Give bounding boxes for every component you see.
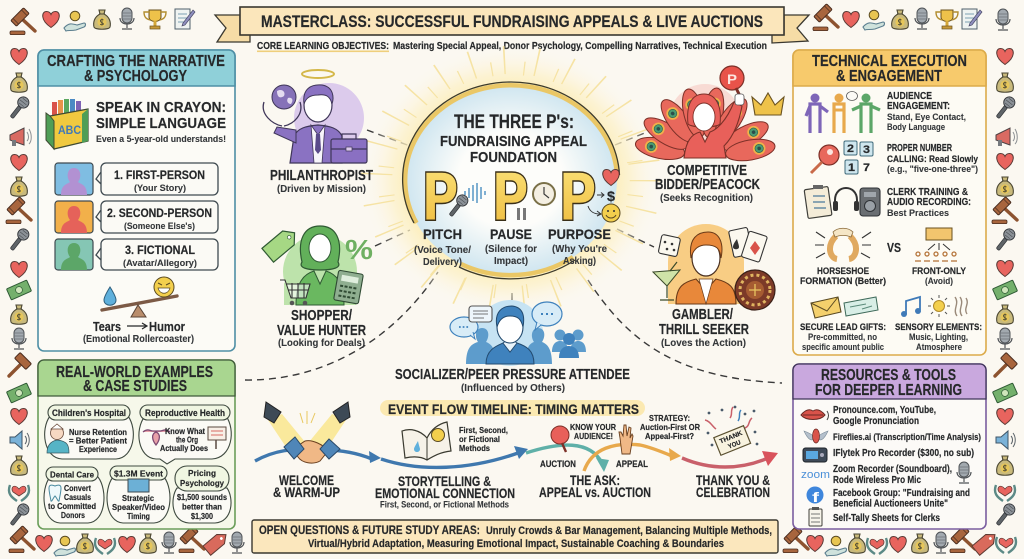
timeline step: storytelling and emotional connection [375,422,528,510]
panel heading: FOR DEEPER LEARNING [815,382,962,399]
proper number calling [811,141,979,175]
pause: P [491,159,529,236]
timeline step: welcome and warm-up: WELCOME [279,473,334,488]
persona: socializer / peer pressure attendee [395,300,630,394]
speak in crayon text: Even a 5-year-old understands! [96,134,226,144]
timeline step: the ask, appeal vs auction: Appeal-First? [645,431,694,441]
proper number calling: CALLING: Read Slowly [887,154,979,165]
decorative icon border: top right [813,4,1010,31]
panel heading [793,364,986,399]
proper number calling: 1 [848,162,855,174]
case: children's hospital: = Better Patient [69,436,127,446]
case: children's hospital [45,405,133,459]
resource: iflytek recorder: IFlytek Pro Recorder ($300, no sub) [833,448,974,459]
persona: competitive bidder / peacock: BIDDER/PEACOCK [655,177,760,193]
purpose: P [558,159,597,236]
audience engagement: Stand, Eye Contact, [887,112,966,123]
panel heading: & PSYCHOLOGY [84,68,188,85]
pitch: PITCH [423,226,462,242]
speak in crayon text: SIMPLE LANGUAGE [96,115,226,132]
persona: shopper / value hunter: VALUE HUNTER [277,323,366,339]
case: reproductive health: Actually Does [160,444,208,453]
front-only formation [912,228,967,287]
open questions banner: Unruly Crowds & Bar Management, Balancing Multiple Methods, [486,525,772,537]
timeline step: the ask, appeal vs auction: STRATEGY: [649,413,690,423]
event flow timeline heading: EVENT FLOW TIMELINE: TIMING MATTERS [388,401,639,417]
case: pricing psychology: $1,500 sounds [177,493,227,502]
decorative icon border: bottom right [783,526,1016,556]
panel heading: REAL-WORLD EXAMPLES [56,364,213,381]
clerk training and audio recording [804,185,971,219]
purpose: Asking) [563,256,596,267]
sensory elements: SENSORY ELEMENTS: [895,322,982,333]
timeline step: the ask, appeal vs auction: APPEAL vs. AUCTION [539,485,651,500]
title banner: MASTERCLASS: SUCCESSFUL FUNDRAISING APPEALS & LIVE AUCTIONS [261,12,763,31]
audience engagement: Body Language [887,122,945,133]
panel heading: CRAFTING THE NARRATIVE [47,53,225,70]
sensory elements: Atmosphere [916,342,962,352]
persona: philanthropist [263,70,373,195]
purpose: PURPOSE [548,226,611,242]
persona: shopper / value hunter: (Looking for Deals) [278,337,365,349]
timeline step: the ask, appeal vs auction: APPEAL [616,459,649,469]
purpose: $ [607,188,615,204]
fictional item [55,239,218,270]
panel: crafting the narrative and psychology [38,50,235,351]
timeline step: storytelling and emotional connection: First, Second, [459,425,508,435]
first-person item [55,163,218,195]
decorative icon border: top left [10,8,195,35]
first-person item: (Your Story) [134,183,186,194]
tears to humor caption: Humor [149,319,185,334]
resource: self-tally sheets [809,507,940,526]
case: dental care [44,467,104,523]
horseshoe formation [800,228,886,287]
panel heading: & CASE STUDIES [83,378,187,395]
front-only formation: (Avoid) [925,276,953,287]
resource: zoom recorder: Rode Wireless Pro Mic [833,475,921,486]
case: children's hospital: Experience [79,445,117,454]
resource: fireflies [804,429,981,443]
timeline step: thank you and celebration: THANK [719,430,744,445]
fictional item: (Avatar/Allegory) [123,258,197,269]
pause: (Silence for [485,244,537,255]
core learning objectives [257,40,767,52]
timeline step: the ask, appeal vs auction: KNOW YOUR [570,422,616,432]
decorative icon border: right column [992,48,1017,528]
decorative icon border: bottom left [9,526,244,556]
secure lead gifts: SECURE LEAD GIFTS: [800,322,886,333]
proper number calling: 3 [863,144,870,156]
decorative icon border: left column [6,48,31,528]
sensory elements: Music, Lighting, [909,332,968,342]
panel: technical execution and engagement [793,50,986,355]
open questions banner: Virtual/Hybrid Adaptation, Measuring Emotional Impact, Sustainable Coaching & Boundaries [308,538,724,550]
heading [440,112,587,166]
timeline step: storytelling and emotional connection: Methods [459,443,490,453]
pause: PAUSE [490,226,532,242]
core learning objectives: CORE LEARNING OBJECTIVES: [257,40,389,52]
case: pricing psychology: better than [182,502,222,512]
clerk training and audio recording: Best Practices [887,208,949,219]
secure lead gifts: Pre-committed, no [808,332,877,342]
second-person item: 2. SECOND-PERSON [107,206,212,220]
heading: FUNDRAISING APPEAL [440,133,587,150]
case: $1.3M event [107,466,170,523]
pitch: Delivery) [423,257,462,268]
timeline step: the ask, appeal vs auction: THE ASK: [570,473,620,488]
timeline step: the ask, appeal vs auction: Auction-First OR [640,422,700,432]
timeline step: thank you and celebration: YOU [727,439,742,451]
open questions banner [252,520,778,553]
timeline step: thank you and celebration: THANK YOU & [696,473,770,488]
audience engagement: ENGAGEMENT: [887,101,950,112]
horseshoe formation: HORSESHOE [817,266,869,277]
pause [485,159,555,267]
icon: crayon box [46,99,88,149]
proper number calling: (e.g., "five-one-three") [887,164,978,175]
second-person item: (Someone Else's) [124,221,195,232]
case: dental care: Convert [64,484,91,493]
first-person item: 1. FIRST-PERSON [114,168,205,182]
timeline step: storytelling and emotional connection: STORYTELLING & [398,474,491,489]
title banner [215,7,809,43]
case: reproductive health: the Org [176,436,198,444]
proper number calling: PROPER NUMBER [887,143,952,154]
persona: philanthropist: PHILANTHROPIST [270,168,373,184]
case: dental care: Donors [61,511,85,520]
panel: resources and tools [793,364,986,529]
persona: shopper / value hunter [262,226,373,349]
timeline step: thank you and celebration: CELEBRATION [696,485,770,500]
second-person item [55,201,218,233]
case: reproductive health: Know What [165,427,205,436]
case: dental care: to Committed [48,502,96,511]
resource: fireflies: Fireflies.ai (Transcription/Time Analysis) [833,432,981,443]
speak in crayon text: SPEAK IN CRAYON: [96,99,226,116]
proper number calling: 7 [863,162,870,174]
timeline step: the ask, appeal vs auction: AUCTION [540,459,576,469]
persona: gambler / thrill seeker: (Loves the Action) [661,337,746,349]
timeline step: welcome and warm-up: & WARM-UP [273,485,340,500]
resource: zoom recorder: zoom [801,469,830,481]
case: dental care: Casuals [64,493,91,502]
case: $1.3M event: Timing [127,512,150,521]
resource: pronunciation sites: Google Pronunciation [833,416,919,427]
resource: facebook group: f [812,489,819,505]
resource: facebook group: Beneficial Auctioneers Unite" [833,498,948,510]
pitch [414,159,485,268]
central sunburst [361,45,661,315]
case: pricing psychology: Pricing [188,468,216,478]
tears to humor caption: Tears [93,319,121,334]
case: children's hospital: Children's Hospital [52,408,126,418]
persona: competitive bidder / peacock [633,66,784,204]
heading: FOUNDATION [470,149,557,166]
persona: philanthropist: (Driven by Mission) [277,183,366,195]
persona: gambler / thrill seeker [653,224,775,349]
case: pricing psychology: $1,300 [191,512,213,521]
audience engagement: AUDIENCE [887,91,932,102]
persona: competitive bidder / peacock: P [727,71,737,87]
resource: self-tally sheets: Self-Tally Sheets for Clerks [833,513,940,524]
panel heading: RESOURCES & TOOLS [821,367,956,384]
clerk training and audio recording: AUDIO RECORDING: [887,197,971,208]
case: reproductive health: Reproductive Health [145,408,225,418]
proper number calling: 2 [847,143,854,155]
purpose [548,159,620,267]
fictional item: 3. FICTIONAL [125,243,195,257]
case: $1.3M event: Speaker/Video [112,503,165,512]
panel: the three P's foundation [403,82,620,279]
speak in crayon text [96,99,226,144]
case: reproductive health [139,405,231,464]
secure lead gifts: specific amount public [802,342,884,352]
persona: shopper / value hunter: % [345,234,373,265]
timeline step: storytelling and emotional connection: EMOTIONAL CONNECTION [375,486,515,501]
resource: pronunciation sites [801,405,936,427]
dashed connectors [245,130,782,383]
panel: real-world examples and case studies [38,360,235,529]
persona: competitive bidder / peacock: COMPETITIVE [667,163,747,179]
case: dental care: Dental Care [50,470,94,480]
core learning objectives: Mastering Special Appeal, Donor Psychology, Compelling Narratives, Technical Execution [393,40,767,52]
horseshoe formation: FORMATION (Better) [800,276,886,287]
case: $1.3M event: $1.3M Event [114,468,163,478]
tears to humor caption: (Emotional Rollercoaster) [83,334,194,345]
persona: gambler / thrill seeker: GAMBLER/ [672,307,733,323]
resource: facebook group: Facebook Group: "Fundraising and [833,488,970,499]
timeline step: storytelling and emotional connection: First, Second, or Fictional Methods [380,500,509,510]
case: $1.3M event: Strategic [122,494,155,503]
persona: gambler / thrill seeker: THRILL SEEKER [659,322,749,338]
resource: zoom recorder [801,462,971,486]
icon: tears to humor seesaw [102,277,177,317]
resource: facebook group [806,486,970,510]
persona: competitive bidder / peacock: (Seeks Recognition) [660,192,753,204]
resource: iflytek recorder [803,448,974,462]
panel heading [38,360,235,396]
secure lead gifts [800,297,886,352]
versus label: VS [887,241,901,255]
timeline step: welcome and warm-up [255,402,381,500]
heading: THE THREE P's: [454,112,574,133]
panel heading: & ENGAGEMENT [836,68,942,85]
front-only formation: FRONT-ONLY [912,266,967,277]
case: pricing psychology [173,466,231,523]
clerk training and audio recording: CLERK TRAINING & [887,187,968,198]
purpose: (Why You're [552,244,607,255]
panel heading [793,50,986,86]
sensory elements [895,295,982,352]
pitch: (Voice Tone/ [414,245,471,256]
pause: Impact) [494,256,528,267]
persona: socializer / peer pressure attendee: SOCIALIZER/PEER PRESSURE ATTENDEE [395,367,630,383]
persona: socializer / peer pressure attendee: (Influenced by Others) [461,382,565,394]
pitch: P [421,159,459,236]
timeline step: thank you and celebration [682,406,778,500]
audience engagement [806,91,966,133]
case: pricing psychology: Psychology [180,478,224,488]
tears to humor caption [83,319,194,345]
case: children's hospital: Nurse Retention [69,428,127,437]
timeline step: the ask, appeal vs auction [526,413,700,500]
timeline step: the ask, appeal vs auction: AUDIENCE! [574,431,613,441]
panel heading [38,50,235,86]
timeline step: storytelling and emotional connection: or Fictional [459,434,500,444]
icon: crayon box: ABC [58,125,81,137]
open questions banner: OPEN QUESTIONS & FUTURE STUDY AREAS: [259,525,480,537]
persona: shopper / value hunter: SHOPPER/ [291,308,352,324]
resource: pronunciation sites: Pronounce.com, YouTube, [833,405,936,416]
panel heading: TECHNICAL EXECUTION [812,53,967,70]
resource: zoom recorder: Zoom Recorder (Soundboard), [833,464,952,475]
